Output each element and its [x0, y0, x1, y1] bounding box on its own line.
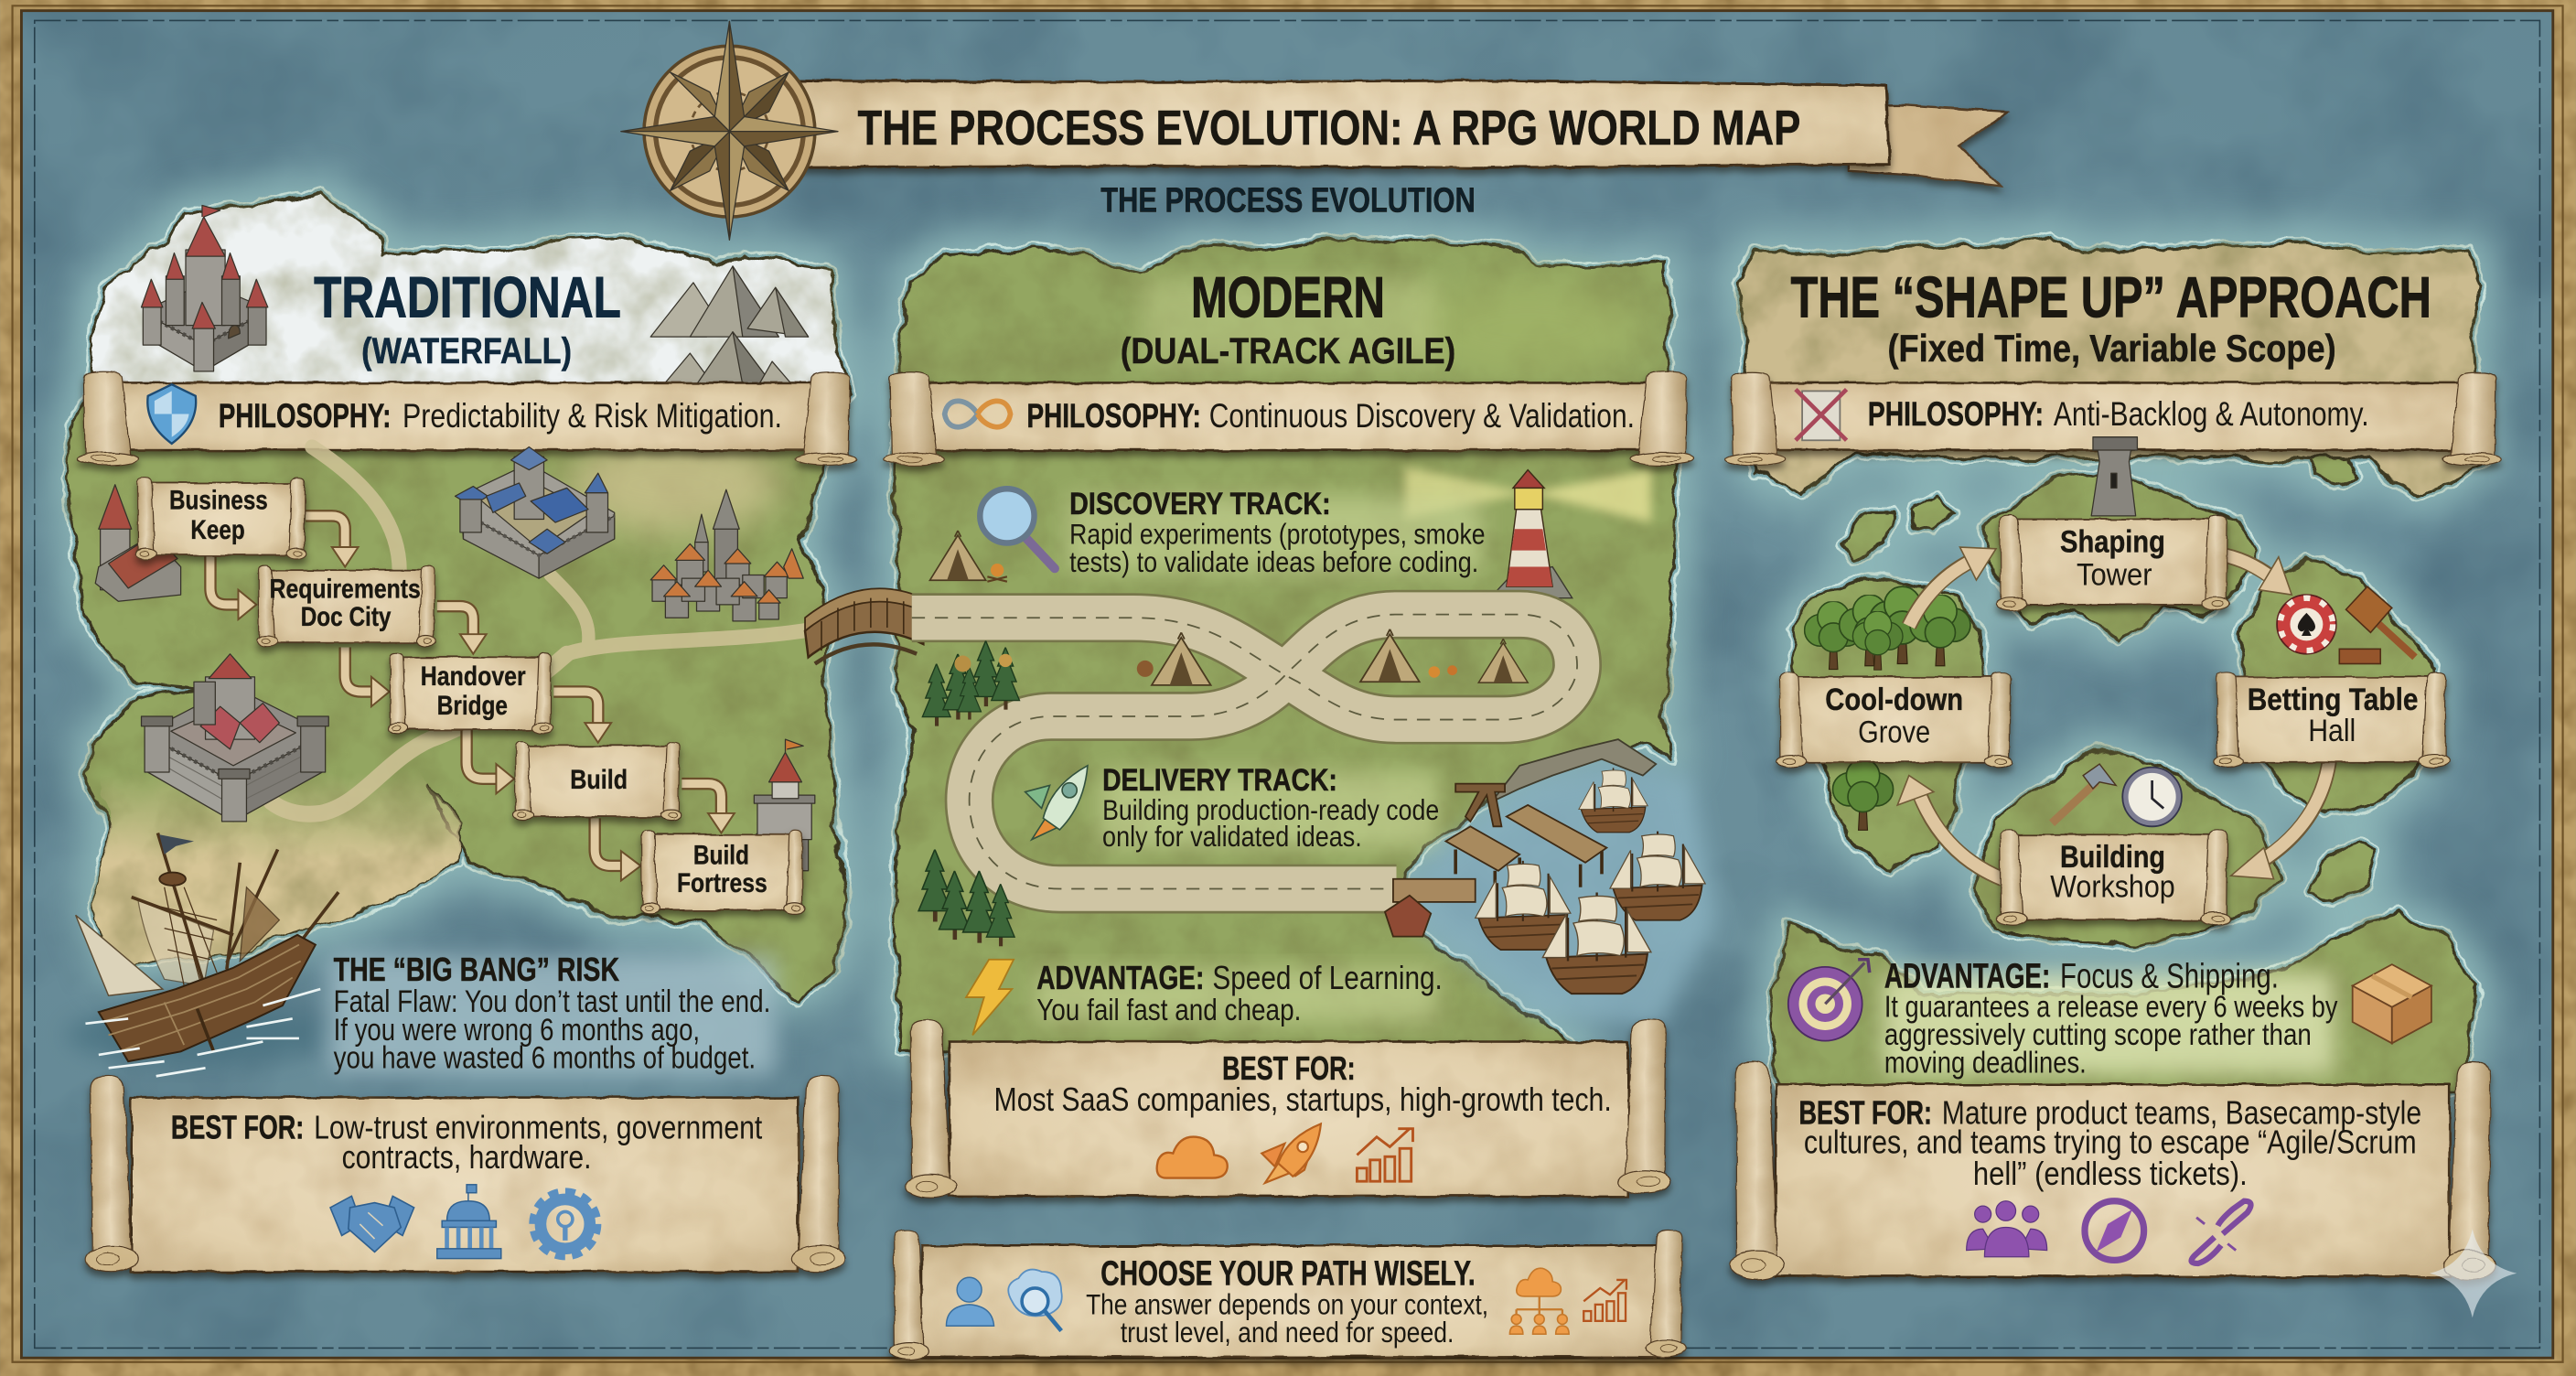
- icon: handshake: [330, 1196, 414, 1252]
- step: handover bridge: [388, 653, 553, 733]
- big bang risk text: If you were wrong 6 months ago,: [334, 1013, 700, 1048]
- advantage text: It guarantees a release every 6 weeks by: [1884, 991, 2338, 1025]
- heading: traditional: TRADITIONAL: [314, 266, 621, 330]
- choose your path scroll: [890, 1231, 1686, 1360]
- big bang risk text: you have wasted 6 months of budget.: [334, 1040, 756, 1075]
- philosophy scroll: [77, 372, 856, 465]
- icon: red castle: [142, 654, 328, 822]
- icon: cloud with magnifier: [1008, 1270, 1062, 1331]
- discovery track text: DISCOVERY TRACK:: [1069, 487, 1331, 521]
- choose your path scroll: trust level, and need for speed.: [1121, 1317, 1454, 1349]
- step: shaping tower: [1997, 515, 2230, 609]
- choose your path scroll: The answer depends on your context,: [1086, 1289, 1488, 1321]
- philosophy scroll: PHILOSOPHY:: [1868, 395, 2044, 433]
- best for scroll: modern: BEST FOR:: [1222, 1049, 1356, 1087]
- road: dual-track infinity: [912, 615, 1577, 889]
- step: requirements doc city: Requirements: [270, 575, 421, 605]
- step: betting table hall: Betting Table: [2248, 683, 2419, 717]
- step: shaping tower: Tower: [2077, 557, 2152, 592]
- icon: shaping tower: [2091, 437, 2137, 516]
- icon: sinking galleon: [66, 833, 338, 1076]
- tan highlands on the shape up land: [1736, 237, 2484, 495]
- big bang risk text: Fatal Flaw: You don’t tast until the end.: [334, 984, 770, 1019]
- icon: small growth chart: [1583, 1280, 1626, 1321]
- philosophy scroll: PHILOSOPHY:: [219, 397, 391, 435]
- big bang risk text: THE “BIG BANG” RISK: [334, 951, 619, 988]
- step: shaping tower: Shaping: [2060, 524, 2165, 559]
- icon: org tree: [1509, 1268, 1569, 1334]
- icon: grove trees: [1805, 586, 1970, 830]
- advantage text: You fail fast and cheap.: [1036, 994, 1301, 1027]
- best for scroll: traditional: contracts, hardware.: [342, 1138, 592, 1176]
- step: business keep: Business: [169, 486, 268, 516]
- soft land tints: [567, 279, 2399, 534]
- icon: compass rose: [621, 21, 838, 240]
- icon: government building: [437, 1185, 501, 1259]
- step: build: Build: [570, 765, 628, 795]
- best for scroll: traditional: BEST FOR:: [171, 1109, 304, 1146]
- advantage text: ADVANTAGE:: [1036, 959, 1204, 996]
- icon: mountains: [650, 266, 809, 384]
- advantage text: Focus & Shipping.: [2060, 956, 2279, 994]
- step: build fortress: Fortress: [677, 868, 767, 898]
- advantage text: Speed of Learning.: [1212, 959, 1443, 996]
- best for scroll: traditional: [85, 1076, 844, 1272]
- title banner: [799, 81, 1889, 167]
- step: handover bridge: Handover: [421, 661, 526, 692]
- icon: shield: [147, 384, 196, 444]
- advantage text: [1883, 956, 2338, 1080]
- icon: blue fort: [456, 446, 615, 578]
- big bang risk text: [328, 951, 776, 1075]
- icon: parcel box: [2353, 964, 2431, 1043]
- icon: wooden bridge: [805, 588, 923, 664]
- best for scroll: shape up: hell” (endless tickets).: [1973, 1155, 2248, 1192]
- heading: modern: MODERN: [1191, 266, 1385, 330]
- advantage text: moving deadlines.: [1884, 1047, 2087, 1080]
- delivery track text: DELIVERY TRACK:: [1102, 763, 1337, 798]
- icon: rocket: [1261, 1123, 1321, 1183]
- icon: team: [1967, 1201, 2047, 1257]
- heading: modern: [1121, 266, 1455, 371]
- icon: clock: [2122, 768, 2182, 826]
- delivery track text: only for validated ideas.: [1102, 821, 1362, 853]
- step: handover bridge: Bridge: [437, 691, 508, 721]
- step: building workshop: Workshop: [2050, 870, 2175, 905]
- icon: harbor: [1385, 739, 1705, 994]
- philosophy scroll: [884, 372, 1694, 465]
- step: build fortress: [639, 831, 804, 914]
- icon: person: [946, 1277, 994, 1326]
- step: build fortress: Build: [693, 841, 749, 871]
- sandy coast: [95, 772, 460, 970]
- icon: hardware gear: [533, 1192, 597, 1256]
- icon: cloud: [1157, 1137, 1228, 1178]
- best for scroll: modern: [905, 1020, 1671, 1199]
- flow: waterfall arrows: [210, 516, 735, 881]
- harbor bay water: [1406, 762, 1717, 1027]
- icon: sparkle watermark: [2430, 1229, 2517, 1317]
- cycle arrows: [1897, 547, 2330, 879]
- step: betting table hall: Hall: [2308, 714, 2356, 748]
- icon: lightning: [966, 960, 1014, 1035]
- subtitle: THE PROCESS EVOLUTION: [1100, 181, 1476, 220]
- step: building workshop: Building: [2060, 840, 2165, 875]
- step: business keep: Keep: [190, 515, 245, 545]
- step: build: [513, 742, 682, 821]
- icon: broken chain: [2192, 1201, 2251, 1263]
- icon: church: [95, 485, 181, 601]
- heading: modern: (DUAL-TRACK AGILE): [1121, 331, 1455, 371]
- panel: modern: [884, 266, 1705, 1360]
- icon: infinity loop: [945, 401, 1011, 427]
- best for scroll: modern: Most SaaS companies, startups, high-growth tech.: [994, 1080, 1612, 1118]
- best for scroll: shape up: [1730, 1061, 2496, 1280]
- icon: gavel: [2339, 586, 2415, 664]
- heading: shape up: (Fixed Time, Variable Scope): [1887, 328, 2336, 370]
- icon: build fortress tower: [754, 739, 815, 871]
- philosophy scroll: Predictability & Risk Mitigation.: [402, 397, 782, 435]
- heading: traditional: [314, 266, 621, 371]
- roads: [271, 446, 813, 814]
- icons: forests: [918, 640, 1019, 946]
- heading: traditional: (WATERFALL): [361, 331, 572, 371]
- title block: [799, 81, 2008, 220]
- advantage text: ADVANTAGE:: [1884, 956, 2050, 994]
- discovery track text: [1068, 487, 1485, 578]
- advantage text: [1035, 959, 1443, 1027]
- step: building workshop: [1997, 831, 2230, 925]
- discovery track text: Rapid experiments (prototypes, smoke: [1069, 518, 1485, 550]
- banner tail: [1848, 105, 2008, 186]
- delivery track text: Building production-ready code: [1102, 794, 1439, 826]
- icon: white castle: [142, 205, 268, 371]
- land masses: [64, 194, 2484, 1092]
- best for scroll: traditional: Low-trust environments, government: [314, 1109, 762, 1146]
- icon: poker chip: [2277, 595, 2336, 654]
- icon: purple compass: [2085, 1201, 2144, 1260]
- step: requirements doc city: [257, 566, 436, 646]
- step: cool-down grove: Grove: [1858, 715, 1930, 750]
- icon: tent and campfire: [930, 531, 1007, 582]
- step: cool-down grove: [1776, 672, 2013, 768]
- philosophy scroll: [1725, 372, 2502, 465]
- best for scroll: shape up: cultures, and teams trying to escape “Agile/Scrum: [1804, 1123, 2417, 1161]
- icon: lighthouse: [1405, 467, 1651, 598]
- step: requirements doc city: Doc City: [301, 602, 392, 632]
- philosophy scroll: PHILOSOPHY:: [1026, 397, 1201, 435]
- icon: target: [1788, 960, 1870, 1041]
- delivery track text: [1100, 763, 1439, 853]
- choose your path scroll: CHOOSE YOUR PATH WISELY.: [1100, 1253, 1476, 1292]
- step: business keep: [135, 478, 306, 559]
- panel: traditional: [66, 205, 856, 1272]
- docks: [1385, 784, 1606, 937]
- philosophy scroll: Anti-Backlog & Autonomy.: [2054, 395, 2369, 433]
- icon: village: [650, 489, 803, 621]
- discovery track text: tests) to validate ideas before coding.: [1069, 546, 1478, 578]
- icon: hammer: [2052, 764, 2116, 823]
- best for scroll: shape up: Mature product teams, Basecamp-style: [1942, 1093, 2421, 1131]
- snow region: [87, 194, 848, 394]
- icon: crossed backlog: [1796, 390, 1847, 440]
- cliffs: [1492, 739, 1656, 801]
- panel: shape up: [1725, 266, 2517, 1317]
- icon: growth chart: [1357, 1129, 1412, 1181]
- step: betting table hall: [2214, 672, 2449, 768]
- philosophy scroll: Continuous Discovery & Validation.: [1209, 397, 1635, 435]
- icon: green rocket: [1025, 766, 1088, 840]
- title text: THE PROCESS EVOLUTION: A RPG WORLD MAP: [857, 101, 1800, 156]
- ships: [1579, 768, 1648, 833]
- best for scroll: shape up: BEST FOR:: [1799, 1093, 1932, 1131]
- advantage text: aggressively cutting scope rather than: [1884, 1018, 2312, 1052]
- icon: magnifier: [980, 489, 1055, 568]
- step: cool-down grove: Cool-down: [1825, 683, 1963, 717]
- icons: road camps: [1137, 629, 1528, 685]
- heading: shape up: [1791, 266, 2431, 370]
- coastal shallows glow: [64, 194, 2484, 1092]
